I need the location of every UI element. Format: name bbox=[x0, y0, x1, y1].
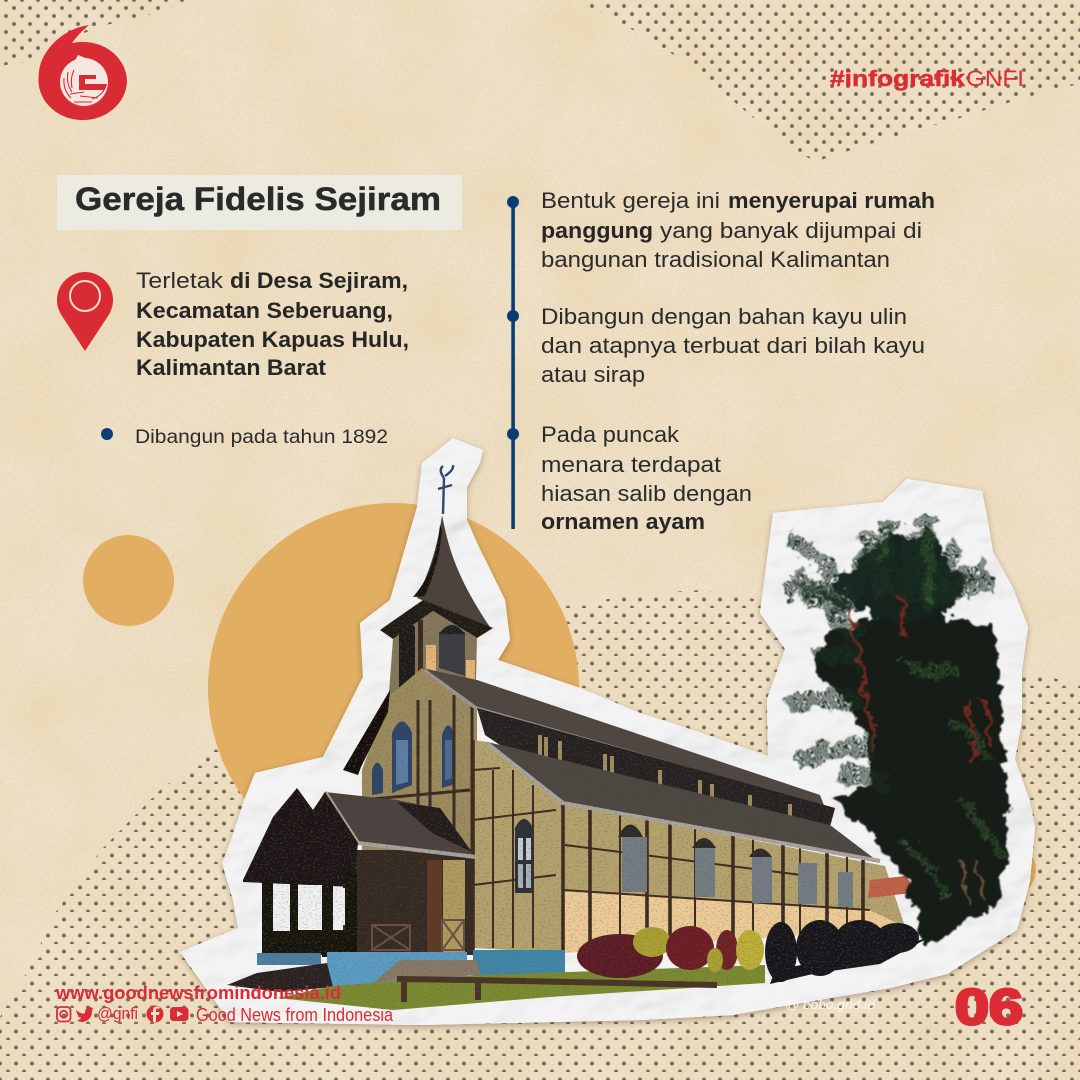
lower roof eave bbox=[488, 744, 880, 861]
upper roof bbox=[422, 668, 825, 808]
hashtag bbox=[830, 66, 1024, 91]
built year bullet: Dibangun pada tahun 1892 bbox=[135, 426, 388, 448]
fact: house shape: yang banyak dijumpai di bbox=[660, 218, 922, 243]
main facade bbox=[362, 668, 477, 948]
tree fronds bbox=[785, 516, 992, 785]
church photo bbox=[227, 465, 928, 1010]
fact: house shape bbox=[541, 188, 935, 272]
clerestory bbox=[477, 708, 835, 827]
page number: 06 bbox=[955, 979, 1023, 1035]
tree green highlights bbox=[880, 528, 1000, 900]
handle: @gnfi bbox=[97, 1004, 138, 1023]
website: www.goodnewsfromindonesia.id bbox=[55, 982, 341, 1003]
fact: house shape: panggung bbox=[541, 218, 653, 243]
motorbikes bbox=[765, 920, 928, 984]
fact: house shape: bangunan tradisional Kalimantan bbox=[541, 247, 890, 272]
location text: Kabupaten Kapuas Hulu, bbox=[136, 327, 409, 352]
timeline bbox=[507, 196, 519, 529]
fact: materials: dan atapnya terbuat dari bilah kayu bbox=[541, 333, 925, 358]
fact: tower ornament: hiasan salib dengan bbox=[541, 481, 752, 506]
peach lower band bbox=[563, 890, 905, 953]
title plate bbox=[57, 175, 462, 230]
icon: map pin bbox=[57, 272, 113, 351]
flowering bushes bbox=[577, 926, 764, 978]
fence bbox=[397, 979, 717, 1002]
location text: Kalimantan Barat bbox=[136, 355, 327, 380]
wall timbers bbox=[473, 740, 870, 953]
palm crowns bbox=[835, 525, 965, 625]
gold circle behind photo bbox=[984, 844, 1036, 896]
side wall bbox=[473, 740, 905, 953]
small gold circle bbox=[83, 535, 174, 626]
tower bbox=[387, 611, 477, 720]
far house bbox=[868, 876, 920, 898]
icon: map pin ring bbox=[70, 281, 100, 311]
icon: instagram bbox=[57, 1007, 70, 1022]
fact: house shape: menyerupai rumah bbox=[728, 188, 935, 213]
location text bbox=[136, 268, 409, 380]
spire bbox=[380, 515, 493, 639]
tree foliage mass bbox=[813, 612, 1008, 945]
location text: di Desa Sejiram, bbox=[230, 268, 408, 293]
torn paper cutout bbox=[180, 438, 1035, 1025]
halftone dots: bottom bbox=[0, 590, 1080, 1080]
fact: materials: Dibangun dengan bahan kayu ulin bbox=[541, 304, 907, 329]
porch pillars bbox=[262, 870, 357, 957]
cross ornament bbox=[438, 465, 453, 514]
steps bbox=[227, 960, 480, 992]
logo bbox=[38, 25, 127, 120]
fact: tower ornament bbox=[541, 422, 752, 534]
porch gables bbox=[243, 788, 358, 887]
porch roof bbox=[325, 792, 476, 857]
icon: facebook bbox=[146, 1006, 164, 1022]
side wall windows bbox=[618, 824, 853, 907]
palm trees bbox=[785, 516, 1008, 945]
left eave bbox=[343, 690, 390, 775]
fact: tower ornament: menara terdapat bbox=[541, 452, 721, 477]
tower windows bbox=[362, 690, 472, 948]
palm trunks bbox=[850, 595, 990, 760]
title plate: Gereja Fidelis Sejiram bbox=[75, 181, 441, 217]
blue base bbox=[257, 950, 565, 987]
arched front window bbox=[515, 819, 533, 893]
porch interior bbox=[343, 850, 473, 955]
halftone dots: top left bbox=[0, 0, 190, 66]
hashtag: #infografik bbox=[830, 66, 966, 91]
social row bbox=[57, 1004, 394, 1025]
channel name: Good News from Indonesia bbox=[196, 1005, 394, 1025]
icon: youtube bbox=[170, 1007, 188, 1021]
location text: Kecamatan Seberuang, bbox=[136, 298, 393, 323]
fact: materials bbox=[541, 304, 925, 387]
fact: tower ornament: Pada puncak bbox=[541, 422, 680, 447]
halftone dots: top right bbox=[575, 0, 1080, 162]
icon: twitter bbox=[76, 1007, 93, 1022]
upper roof eave bbox=[424, 670, 825, 808]
lower roof bbox=[487, 742, 880, 863]
hashtag: GNFI bbox=[966, 66, 1024, 91]
porch sky gaps bbox=[273, 884, 345, 931]
location text: Terletak bbox=[136, 268, 224, 293]
fact: house shape: Bentuk gereja ini bbox=[541, 188, 720, 213]
large gold circle bbox=[208, 503, 579, 874]
fact: tower ornament: ornamen ayam bbox=[541, 509, 705, 534]
photo credit: @ bobo.grid.id bbox=[785, 997, 876, 1012]
lawn bbox=[277, 965, 765, 1010]
fact: materials: atau sirap bbox=[541, 362, 645, 387]
